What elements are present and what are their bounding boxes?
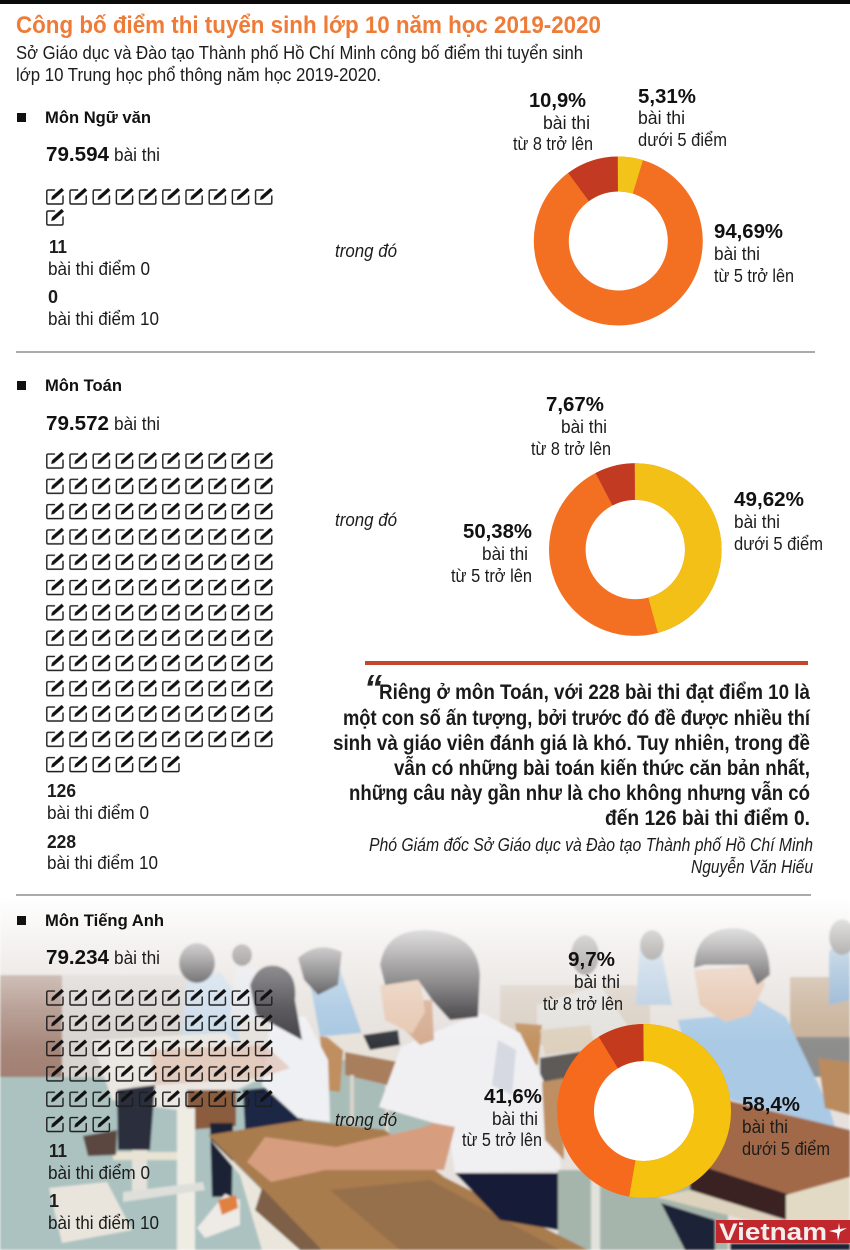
total exams: 79.594: [46, 143, 110, 166]
label: 50,38%: từ 5 trở lên: [451, 566, 532, 586]
stat: score 10: [47, 832, 158, 873]
white table at left: [92, 1033, 262, 1112]
stat: score 10: bài thi điểm 10: [48, 309, 159, 329]
label: 5,31%: dưới 5 điểm: [638, 130, 727, 150]
label: 10,9%: từ 8 trở lên: [513, 134, 593, 154]
stat: score 0: bài thi điểm 0: [47, 803, 149, 823]
label: 50,38%: bài thi: [482, 544, 528, 564]
stat: score 0: [48, 1141, 150, 1183]
label: 94,69%: 94,69%: [714, 220, 783, 243]
quote text: [333, 681, 811, 830]
panel: Tiếng Anh: [17, 911, 830, 1233]
stat: score 0: bài thi điểm 0: [48, 1163, 150, 1183]
label: 7,67%: bài thi: [561, 417, 607, 437]
far background desks: [500, 985, 650, 1045]
label: 5,31%: bài thi: [638, 108, 685, 128]
donut chart: Ngữ văn: [551, 174, 685, 308]
mid desks and chair: [320, 1036, 344, 1092]
quote attribution: [369, 835, 813, 877]
label: 10,9%: [513, 89, 593, 154]
stat: score 0: 126: [47, 781, 76, 801]
label: 5,31%: 5,31%: [638, 85, 696, 108]
stat: score 0: 11: [49, 1141, 67, 1161]
label: 41,6%: từ 5 trở lên: [462, 1130, 542, 1150]
quote attribution: Nguyễn Văn Hiếu: [691, 857, 813, 877]
stat: score 0: bài thi điểm 0: [48, 259, 150, 279]
panel: Ngữ văn: [17, 85, 794, 329]
label: 50,38%: 50,38%: [463, 520, 532, 543]
label: 9,7%: 9,7%: [568, 948, 615, 971]
stat: score 0: [48, 237, 150, 279]
stat: score 10: [48, 287, 159, 329]
intro text: [16, 42, 583, 85]
label: 9,7%: từ 8 trở lên: [543, 994, 623, 1014]
logo: Vietnam+: Vietnam: [719, 1219, 827, 1246]
label: 49,62%: dưới 5 điểm: [734, 534, 823, 554]
label: 50,38%: [451, 520, 532, 586]
right desk and chair: [818, 1058, 850, 1115]
seated girl: [117, 1085, 155, 1150]
label: 41,6%: 41,6%: [484, 1085, 542, 1108]
heading: Môn Ngữ văn: Môn Ngữ văn: [45, 108, 151, 127]
title: Công bố điểm thi tuyển sinh lớp 10 năm học 2019-2020: [16, 12, 601, 39]
stat: score 10: 1: [49, 1191, 59, 1211]
label: 5,31%: [638, 85, 727, 150]
label: 58,4%: [742, 1093, 830, 1159]
label: 58,4%: dưới 5 điểm: [742, 1139, 830, 1159]
background photo: students in exam room: [0, 896, 850, 1250]
label: 58,4%: bài thi: [742, 1117, 788, 1137]
label: 94,69%: [714, 220, 794, 286]
panel: Toán: [17, 376, 823, 877]
heading: Môn Toán: Môn Toán: [45, 376, 122, 395]
label: trong đó: trong đó: [335, 1110, 397, 1130]
total exams: [46, 946, 160, 969]
label: 41,6%: [462, 1085, 542, 1150]
wall and floor areas: [0, 975, 62, 1077]
right boy: [678, 997, 835, 1127]
stat: score 10: [48, 1191, 159, 1233]
total exams: 79.572: [46, 412, 109, 435]
intro text: lớp 10 Trung học phổ thông năm học 2019-2020.: [16, 64, 381, 85]
stat: score 10: bài thi điểm 10: [47, 853, 158, 873]
icons: 126 exam papers: [46, 451, 278, 780]
label: 10,9%: 10,9%: [529, 89, 586, 112]
foreground desk: [208, 1120, 588, 1250]
quote text: sinh và giáo viên đánh giá là khó. Tuy nhiên, trong đề: [333, 732, 810, 755]
label: 94,69%: từ 5 trở lên: [714, 266, 794, 286]
label: trong đó: trong đó: [335, 241, 397, 261]
label: 10,9%: bài thi: [543, 113, 590, 133]
total exams: bài thi: [114, 145, 160, 165]
label: 9,7%: [543, 948, 623, 1014]
icons: 11 exam papers: [46, 187, 278, 229]
stat: score 10: 0: [48, 287, 58, 307]
quote text: Riêng ở môn Toán, với 228 bài thi đạt điểm 10 là: [379, 681, 810, 704]
stat: score 0: 11: [49, 237, 67, 257]
total exams: bài thi: [114, 414, 160, 434]
total exams: [46, 412, 160, 435]
donut chart: Toán: [567, 482, 703, 618]
back-row students: [181, 972, 240, 1041]
callout: quote: [333, 661, 813, 877]
stat: score 10: bài thi điểm 10: [48, 1213, 159, 1233]
heading: Môn Tiếng Anh: Môn Tiếng Anh: [45, 911, 164, 930]
total exams: 79.234: [46, 946, 110, 969]
label: 7,67%: [531, 393, 611, 459]
quote text: vẫn có những bài toán kiến thức căn bản nhất,: [394, 756, 810, 780]
icons: 53 exam papers: [46, 988, 278, 1140]
top black bar: [0, 0, 850, 4]
stat: score 0: [47, 781, 149, 823]
quote text: đến 126 bài thi điểm 0.: [605, 807, 810, 830]
stat: score 10: 228: [47, 832, 76, 852]
quote mark: “: [364, 667, 382, 708]
label: 41,6%: bài thi: [492, 1109, 538, 1129]
logo: Vietnam+: [716, 1219, 850, 1246]
donut chart: Tiếng Anh: [576, 1042, 712, 1180]
label: 7,67%: từ 8 trở lên: [531, 439, 611, 459]
label: 7,67%: 7,67%: [546, 393, 604, 416]
label: 58,4%: 58,4%: [742, 1093, 800, 1116]
label: 49,62%: 49,62%: [734, 488, 804, 511]
center boy: [379, 1013, 561, 1173]
intro text: Sở Giáo dục và Đào tạo Thành phố Hồ Chí Minh công bố điểm thi tuyển sinh: [16, 42, 583, 63]
label: trong đó: trong đó: [335, 510, 397, 530]
label: 9,7%: bài thi: [574, 972, 620, 992]
total exams: [46, 143, 160, 166]
label: 94,69%: bài thi: [714, 244, 760, 264]
total exams: bài thi: [114, 948, 160, 968]
label: 49,62%: [734, 488, 823, 554]
label: 49,62%: bài thi: [734, 512, 780, 532]
